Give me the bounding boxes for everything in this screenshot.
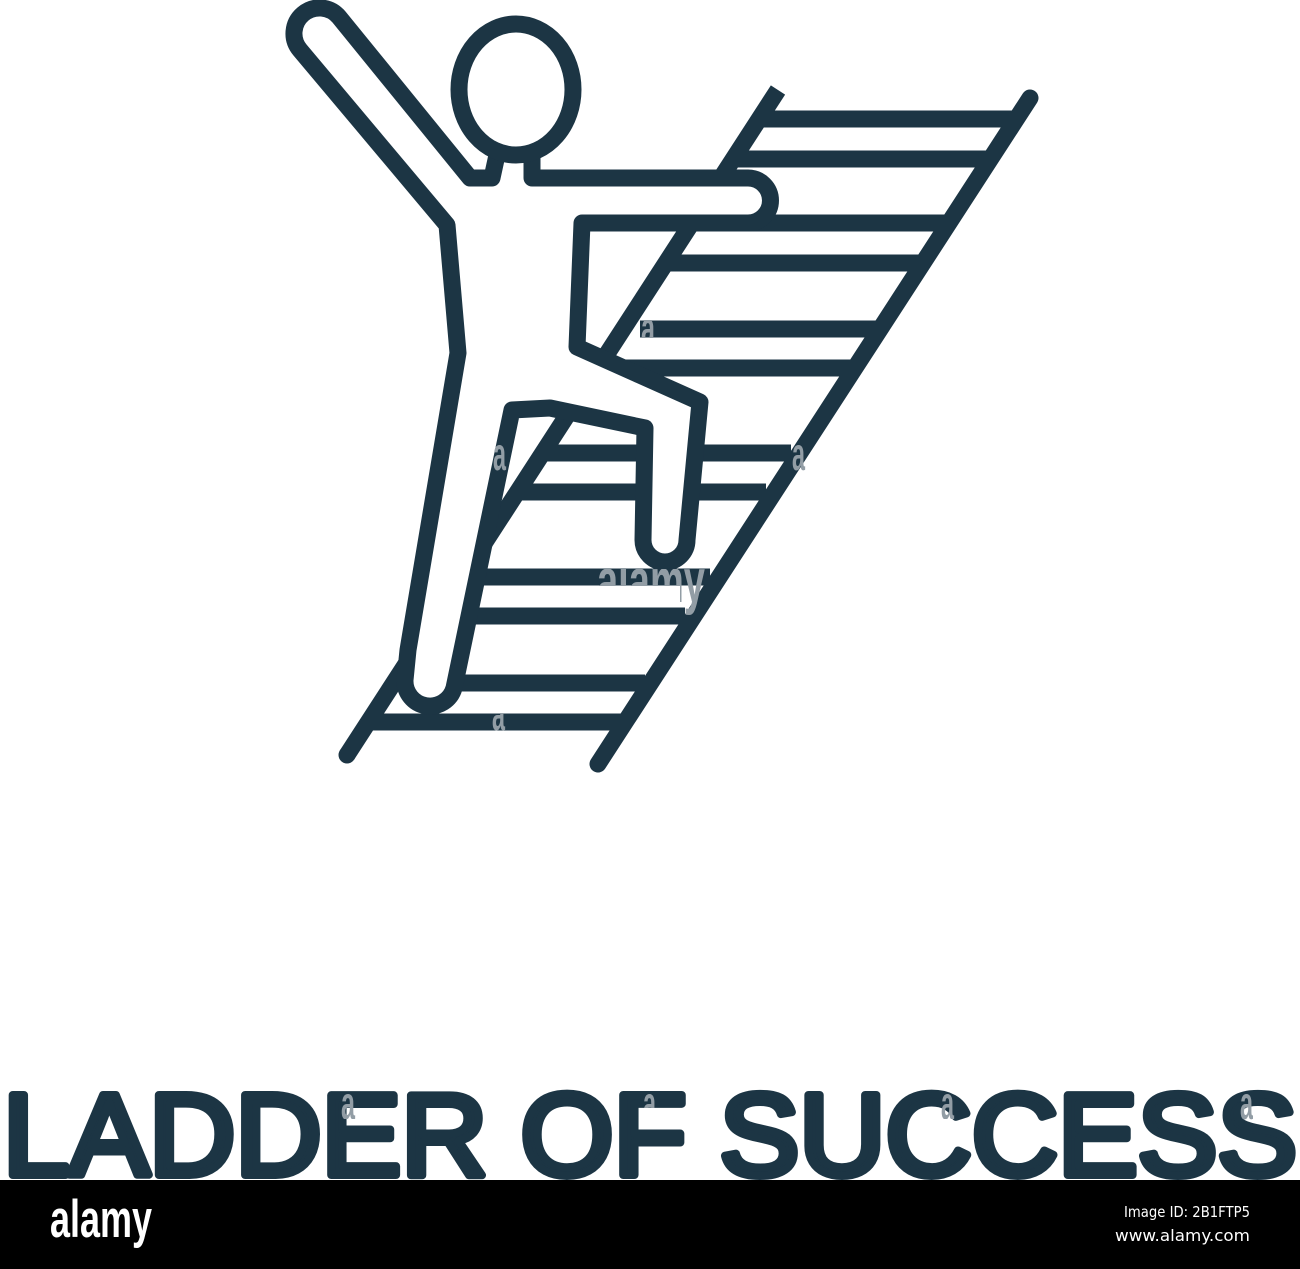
watermark a, leg: a (493, 428, 506, 480)
website: www.alamy.com (1115, 1226, 1250, 1245)
watermark a 2: a (643, 1077, 656, 1129)
ladder left rail (347, 90, 778, 755)
watermark marks over title (342, 1094, 1253, 1120)
image id: Image ID: 2B1FTP5 (1124, 1203, 1250, 1221)
figure body (294, 8, 770, 706)
watermark a, right rail: a (792, 428, 805, 480)
watermark alamy: alamy (597, 547, 705, 616)
icon: climbing figure (294, 8, 770, 706)
icon: ladder (338, 90, 1030, 764)
watermark a, upper rung: a (641, 302, 655, 354)
watermark a 3: a (941, 1077, 954, 1129)
ladder rungs (368, 119, 1014, 722)
title: LADDER OF SUCCESS (3, 1070, 1297, 1200)
watermark marks over icon (492, 302, 805, 740)
ladder right rail (598, 98, 1030, 764)
band background (0, 1180, 1300, 1269)
watermark a 4: a (1240, 1077, 1253, 1129)
footer band (0, 1180, 1300, 1269)
figure head (459, 24, 573, 155)
alamy logo: alamy (50, 1190, 152, 1249)
watermark a, bottom rung: a (492, 688, 505, 740)
ladder left rail foot (338, 746, 356, 764)
watermark a 1: a (341, 1077, 355, 1129)
